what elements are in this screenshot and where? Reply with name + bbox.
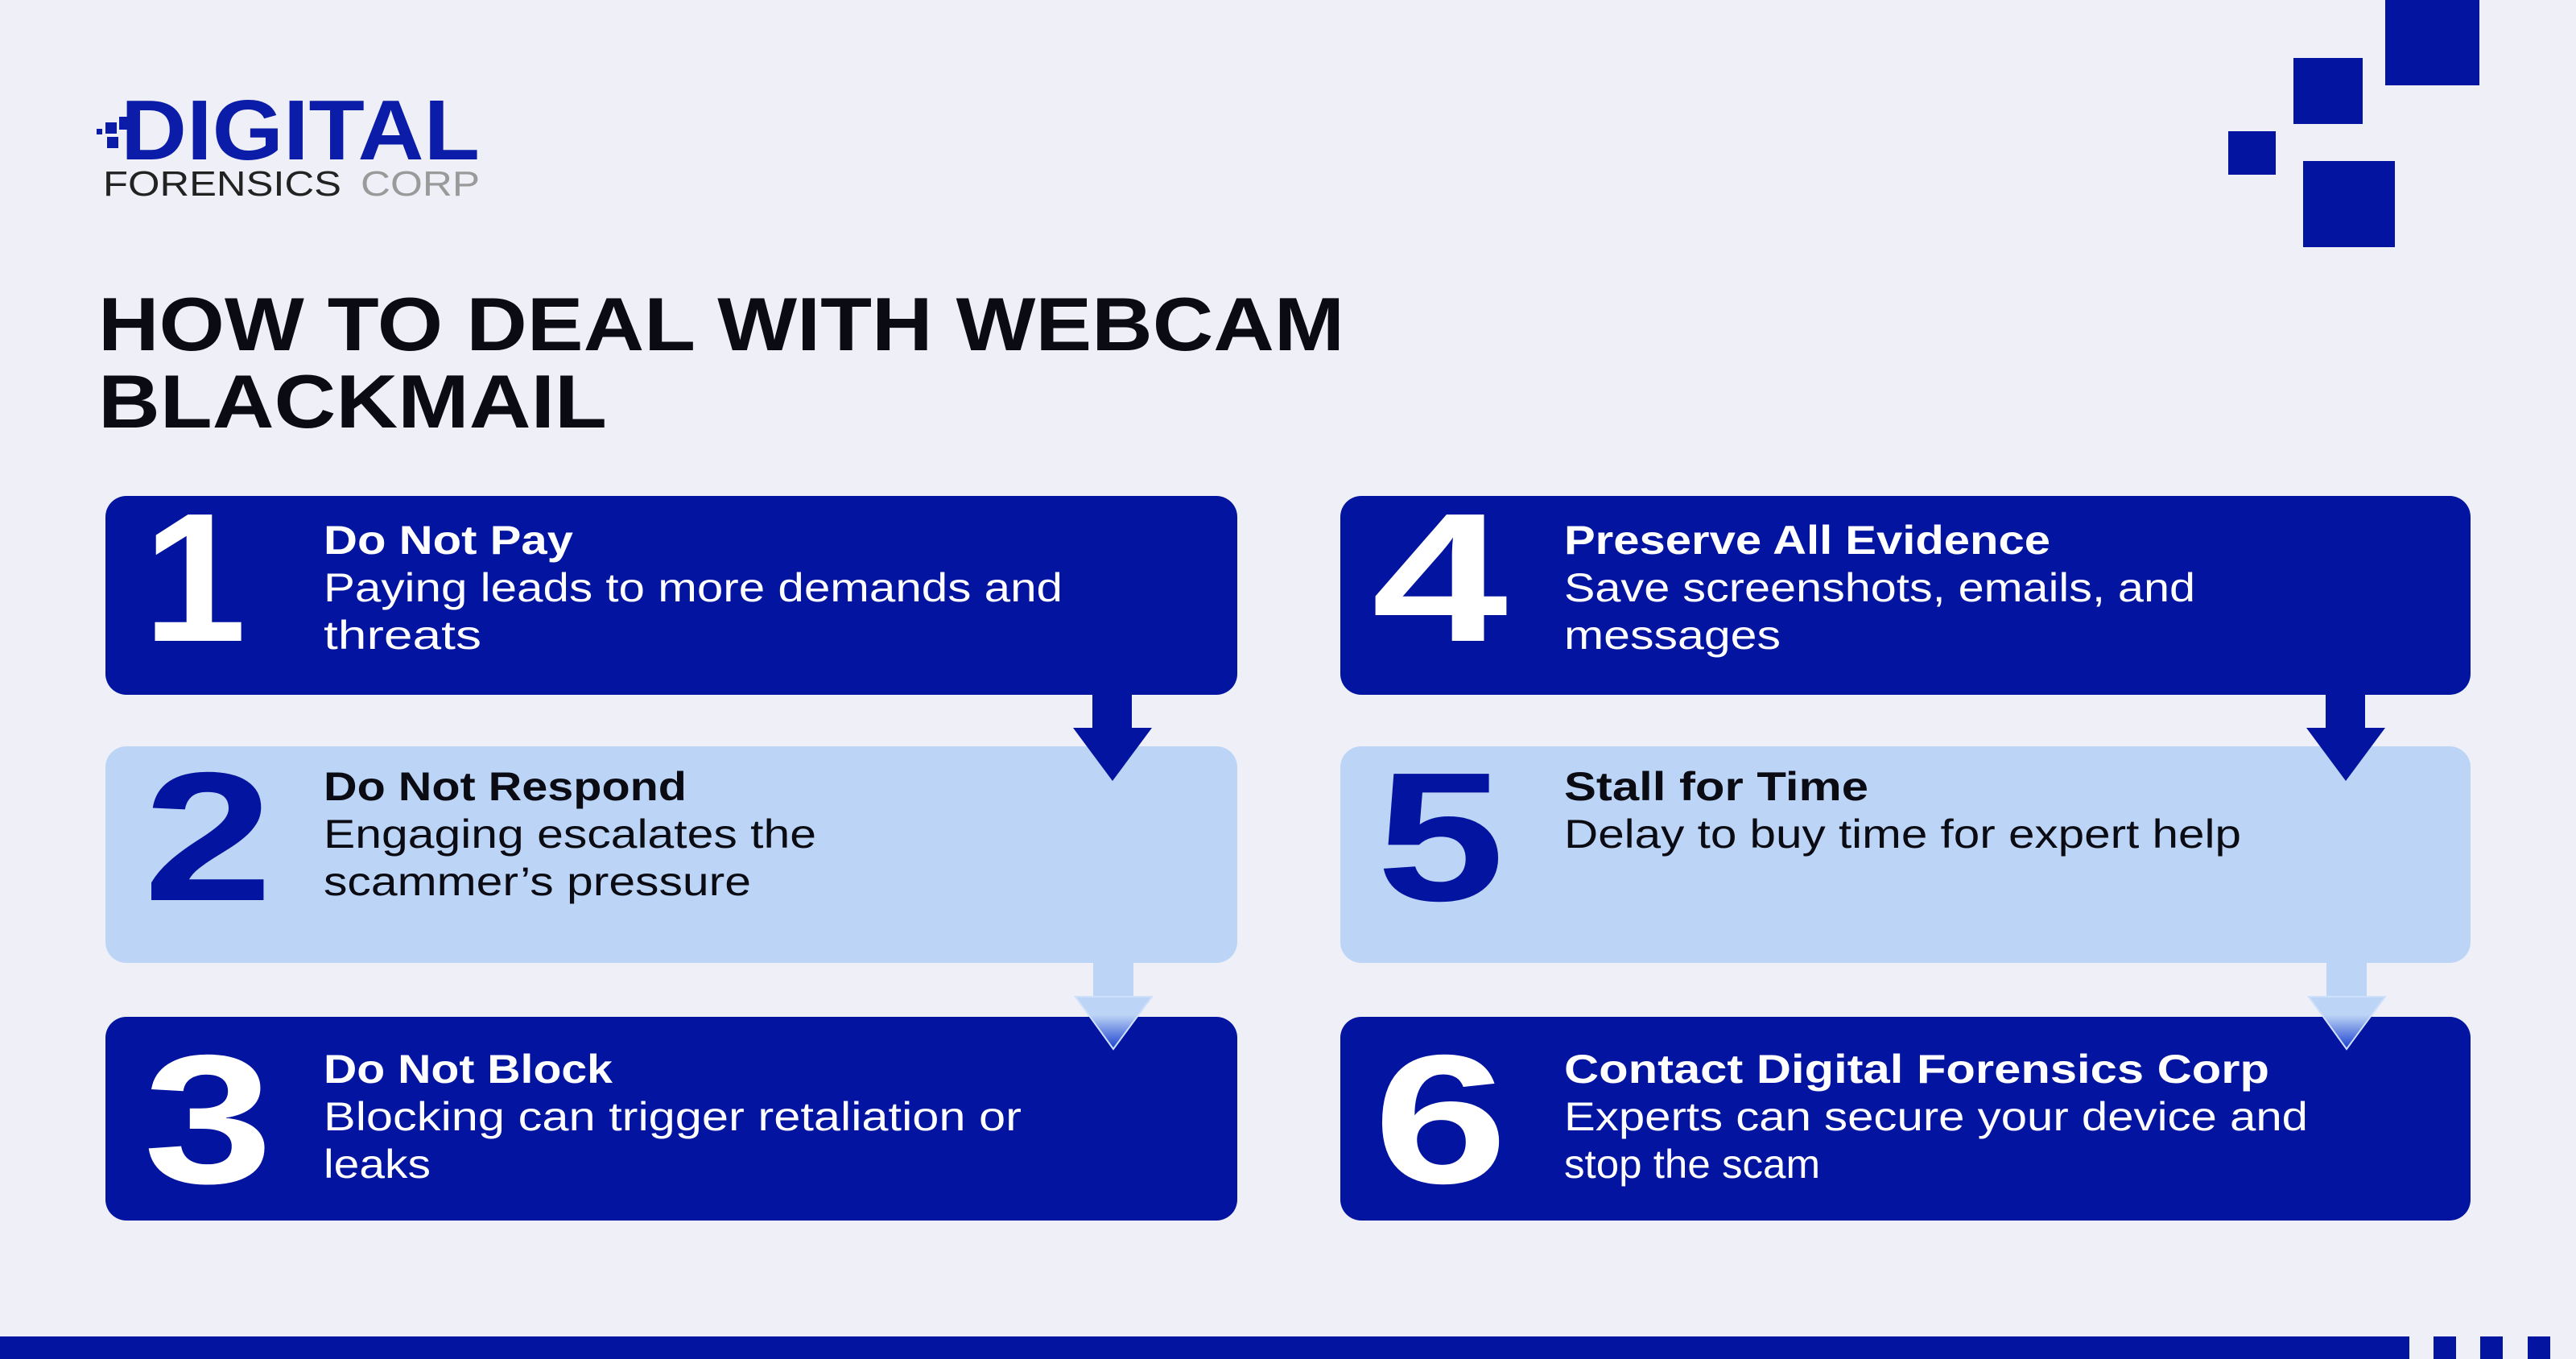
arrow: 1 to 2 (1073, 692, 1152, 781)
card 2: Engaging escalates the (324, 812, 816, 857)
card 3 (105, 1017, 1237, 1222)
decorative squares top right (2228, 0, 2479, 247)
card 4: messages (1564, 613, 1781, 658)
card 6: Experts can secure your device and (1564, 1094, 2308, 1139)
arrow: 5 to 6 (2309, 961, 2385, 1049)
card 4 (1340, 476, 2471, 695)
arrow: 2 to 3 (1075, 961, 1152, 1049)
card 4: Preserve All Evidence (1564, 518, 2050, 563)
card 6 (1340, 1017, 2471, 1222)
card 3: 3 (143, 1018, 273, 1222)
card 1: 1 (143, 476, 246, 680)
card 1: threats (324, 613, 481, 658)
card 6: Contact Digital Forensics Corp (1564, 1047, 2269, 1092)
card 2 (105, 735, 1237, 963)
title: HOW TO DEAL WITH WEBCAM (98, 282, 1344, 366)
card 5: 5 (1377, 735, 1505, 940)
card 6: stop the scam (1564, 1142, 1820, 1187)
card 3: Do Not Block (324, 1047, 613, 1092)
title (98, 282, 1344, 444)
arrow: 4 to 5 (2306, 692, 2385, 781)
card 6: 6 (1373, 1018, 1508, 1222)
card 1: Do Not Pay (324, 518, 573, 563)
logo icon: pixel squares (97, 117, 132, 148)
card 2: 2 (143, 735, 273, 940)
logo (97, 83, 480, 204)
logo: DIGITAL (121, 83, 480, 178)
card 2: scammer’s pressure (324, 859, 751, 904)
card 2: Do Not Respond (324, 764, 687, 809)
card 3: Blocking can trigger retaliation or (324, 1094, 1022, 1139)
card 4: Save screenshots, emails, and (1564, 565, 2195, 610)
card 1: Paying leads to more demands and (324, 565, 1063, 610)
title: BLACKMAIL (98, 359, 607, 444)
card 1 (105, 476, 1237, 695)
card 5: Stall for Time (1564, 764, 1868, 809)
card 3: leaks (324, 1142, 431, 1187)
logo: CORP (361, 164, 480, 204)
card 4: 4 (1372, 476, 1508, 680)
card 5: Delay to buy time for expert help (1564, 812, 2241, 857)
bottom bar (0, 1336, 2550, 1359)
card 5 (1340, 735, 2471, 963)
logo: FORENSICS (103, 164, 341, 204)
